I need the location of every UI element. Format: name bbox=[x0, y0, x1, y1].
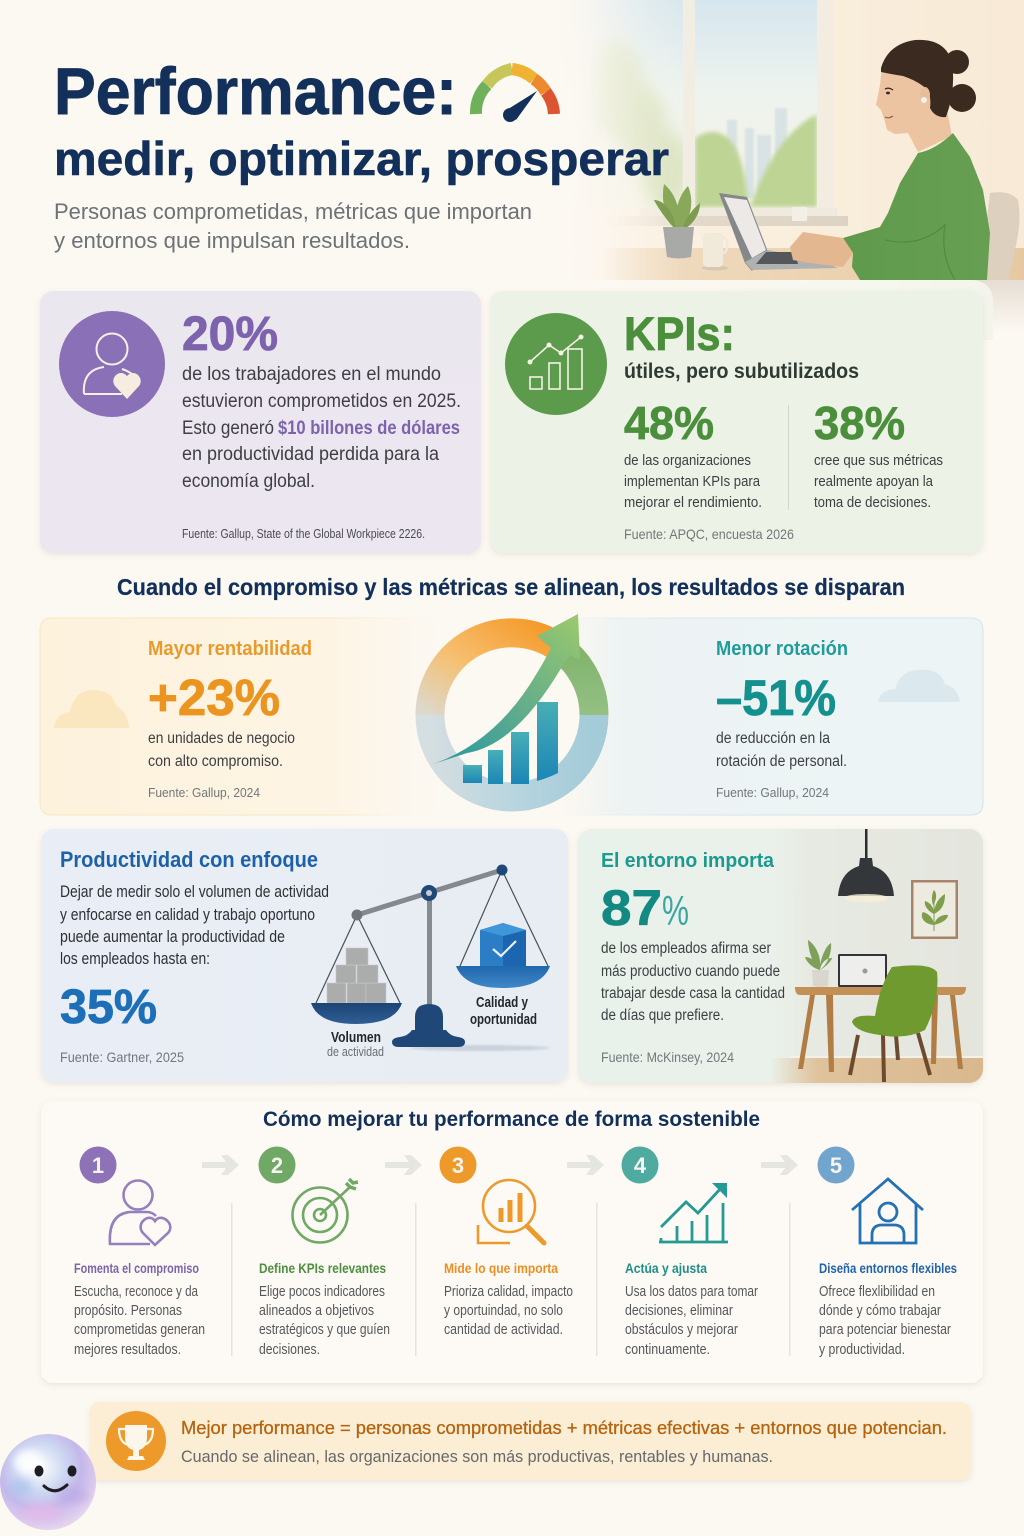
icon: trophy bbox=[106, 1411, 166, 1471]
stat 38%: 38% bbox=[814, 397, 905, 449]
text: con alto compromiso. bbox=[148, 753, 283, 770]
label calidad: oportunidad bbox=[470, 1012, 537, 1028]
mug bbox=[702, 233, 728, 270]
icon: person heart bbox=[110, 1180, 170, 1245]
text block: trabajar desde casa la cantidad bbox=[601, 985, 785, 1002]
panel: menor rotación bbox=[560, 618, 983, 815]
heading: Mayor rentabilidad bbox=[148, 638, 312, 660]
left pan with gray cubes bbox=[311, 910, 402, 1024]
step 3: cantidad de actividad. bbox=[444, 1322, 563, 1338]
label volumen bbox=[327, 1030, 384, 1059]
desk bbox=[600, 248, 1024, 280]
icon: smiling pearl mascot bbox=[0, 1434, 96, 1530]
heading KPIs: KPIs: bbox=[624, 307, 735, 360]
step 5 bbox=[818, 1146, 957, 1358]
text block: estuvieron comprometidos en 2025. bbox=[182, 391, 461, 412]
step 4: decisiones, eliminar bbox=[625, 1303, 733, 1319]
step 5: dónde y cómo trabajar bbox=[819, 1303, 941, 1319]
heading: Menor rotación bbox=[716, 638, 848, 660]
stat 38%: toma de decisiones. bbox=[814, 494, 931, 511]
woman bbox=[790, 40, 990, 280]
subtitle: y entornos que impulsan resultados. bbox=[54, 228, 410, 253]
potted plant bbox=[654, 184, 700, 258]
text block: de los trabajadores en el mundo bbox=[182, 364, 441, 385]
step 2: Elige pocos indicadores bbox=[259, 1284, 385, 1300]
label calidad: Calidad y bbox=[476, 995, 528, 1011]
text: en unidades de negocio bbox=[148, 730, 295, 747]
title bbox=[54, 54, 669, 185]
step 3 bbox=[440, 1146, 573, 1338]
panel: mayor rentabilidad bbox=[40, 618, 440, 815]
panel: productividad con enfoque bbox=[41, 829, 568, 1082]
text block: $10 billones de dólares bbox=[278, 418, 460, 439]
step 4: 4 bbox=[634, 1153, 647, 1178]
window with view of trees and city bbox=[596, 0, 848, 226]
step 2: Define KPIs relevantes bbox=[259, 1260, 386, 1276]
text block: puede aumentar la productividad de bbox=[60, 928, 285, 946]
text block bbox=[182, 364, 461, 492]
step 1: propósito. Personas bbox=[74, 1303, 182, 1319]
hero illustration: woman working at laptop by window bbox=[594, 0, 1024, 280]
source: Fuente: McKinsey, 2024 bbox=[601, 1049, 734, 1065]
right pan with blue cube bbox=[456, 864, 550, 988]
subheading: útiles, pero subutilizados bbox=[624, 360, 859, 383]
step 2 bbox=[258, 1146, 390, 1358]
step 3: 3 bbox=[452, 1153, 464, 1178]
text block: Dejar de medir solo el volumen de actividad bbox=[60, 883, 329, 901]
icon: gauge bbox=[476, 69, 554, 122]
step 5: Ofrece flexlibilidad en bbox=[819, 1284, 935, 1300]
hands bbox=[790, 232, 853, 267]
text bbox=[716, 730, 847, 770]
illustration: home office bbox=[770, 829, 983, 1083]
panel: KPIs bbox=[490, 291, 983, 553]
step 2: decisiones. bbox=[259, 1342, 320, 1358]
text block: los empleados hasta en: bbox=[60, 950, 210, 968]
text: rotación de personal. bbox=[716, 753, 847, 770]
step 1: mejores resultados. bbox=[74, 1342, 181, 1358]
chair bbox=[987, 192, 1020, 280]
source: Fuente: Gallup, 2024 bbox=[716, 785, 829, 800]
text block bbox=[601, 940, 785, 1024]
stat -51%: –51% bbox=[716, 670, 836, 726]
stat 38% bbox=[814, 397, 943, 511]
pivot and base bbox=[421, 885, 437, 901]
text block: Esto generó bbox=[182, 418, 274, 439]
lamp bbox=[865, 829, 868, 858]
icon: chart in circle bbox=[505, 313, 607, 415]
section heading: Cuando el compromiso y las métricas se alinean, los resultados se disparan bbox=[117, 574, 905, 600]
step 2: estratégicos y que guíen bbox=[259, 1322, 390, 1338]
panel: 20% trabajadores comprometidos bbox=[40, 291, 481, 553]
step 1: comprometidas generan bbox=[74, 1322, 205, 1338]
stat 87%: % bbox=[662, 887, 689, 934]
icon: rising chart bbox=[659, 1183, 728, 1242]
source: Fuente: Gallup, 2024 bbox=[148, 785, 260, 800]
label calidad bbox=[470, 995, 537, 1028]
step 4: obstáculos y mejorar bbox=[625, 1322, 738, 1338]
step 5: para potenciar bienestar bbox=[819, 1322, 951, 1338]
step 5: Diseña entornos flexibles bbox=[819, 1260, 957, 1276]
step 5: 5 bbox=[830, 1153, 842, 1178]
arrow bbox=[427, 614, 580, 766]
text block: de los empleados afirma ser bbox=[601, 940, 771, 957]
white panel rim over hero bbox=[970, 280, 1024, 332]
fade left of hero bbox=[540, 0, 667, 280]
source: Fuente: APQC, encuesta 2026 bbox=[624, 526, 794, 542]
stat +23%: +23% bbox=[148, 669, 280, 726]
text: de reducción en la bbox=[716, 730, 830, 747]
icon: magnifier with bars bbox=[478, 1180, 544, 1243]
step 4: Actúa y ajusta bbox=[625, 1260, 707, 1276]
stat 48% bbox=[624, 397, 762, 511]
step 1: Escucha, reconoce y da bbox=[74, 1284, 199, 1300]
frame bbox=[911, 880, 958, 939]
step 4: Usa los datos para tomar bbox=[625, 1284, 758, 1300]
laptop bbox=[719, 193, 838, 271]
panel: el entorno importa bbox=[578, 829, 983, 1083]
step 1: 1 bbox=[92, 1153, 104, 1178]
face and neck bbox=[876, 64, 952, 152]
callout line 2: Cuando se alinean, las organizaciones son más productivas, rentables y humanas. bbox=[181, 1448, 773, 1466]
subtitle bbox=[54, 199, 532, 253]
step 3: Mide lo que importa bbox=[444, 1260, 558, 1276]
table bbox=[795, 987, 966, 1072]
label volumen: Volumen bbox=[331, 1030, 381, 1046]
stat 20%: 20% bbox=[182, 308, 278, 361]
step 2: 2 bbox=[271, 1153, 283, 1178]
illustration: balance scale bbox=[311, 864, 550, 1059]
chair bbox=[850, 965, 938, 1082]
callout: mejor performance bbox=[90, 1402, 971, 1480]
laptop bbox=[838, 954, 887, 987]
chart: ring with rising arrow and bars bbox=[415, 614, 609, 812]
step 3: y oportuindad, no solo bbox=[444, 1303, 563, 1319]
step 1: Fomenta el compromiso bbox=[74, 1260, 199, 1276]
stat 38%: cree que sus métricas bbox=[814, 452, 943, 469]
stat 48%: mejorar el rendimiento. bbox=[624, 494, 762, 511]
heading: Productividad con enfoque bbox=[60, 847, 318, 872]
step 3: Prioriza calidad, impacto bbox=[444, 1284, 573, 1300]
icon: person with heart bbox=[59, 311, 165, 417]
heading: Cómo mejorar tu performance de forma sostenible bbox=[263, 1107, 760, 1131]
title line 2: medir, optimizar, prosperar bbox=[54, 132, 669, 185]
text block: y enfocarse en calidad y trabajo oportuno bbox=[60, 906, 315, 924]
source: Fuente: Gartner, 2025 bbox=[60, 1049, 184, 1065]
plant bbox=[805, 940, 832, 970]
stat 48%: de las organizaciones bbox=[624, 452, 751, 469]
stat 48%: implementan KPIs para bbox=[624, 473, 761, 490]
stat 87%: 87 bbox=[601, 880, 662, 936]
arrows between steps bbox=[202, 1155, 798, 1175]
step 4 bbox=[622, 1146, 758, 1358]
text block: de días que prefiere. bbox=[601, 1007, 724, 1024]
icon: cloud bbox=[878, 670, 960, 702]
stat 38%: realmente apoyan la bbox=[814, 473, 934, 490]
source: Fuente: Gallup, State of the Global Workpiece 2226. bbox=[182, 527, 425, 541]
text block: más productivo cuando puede bbox=[601, 963, 780, 980]
step 1 bbox=[74, 1146, 205, 1358]
label volumen: de actividad bbox=[327, 1045, 384, 1059]
step 4: continuamente. bbox=[625, 1342, 710, 1358]
stat 35%: 35% bbox=[60, 981, 157, 1034]
text bbox=[148, 730, 295, 770]
title line 1: Performance: bbox=[54, 54, 457, 128]
callout line 1: Mejor performance = personas comprometidas + métricas efectivas + entornos que potencian. bbox=[181, 1417, 947, 1438]
stat 87% bbox=[601, 880, 689, 936]
text block: economía global. bbox=[182, 471, 315, 492]
icon: target bbox=[292, 1179, 358, 1242]
icon: cloud bbox=[54, 690, 129, 728]
step 5: y productividad. bbox=[819, 1342, 905, 1358]
panel: cómo mejorar tu performance bbox=[41, 1101, 983, 1383]
text block: en productividad perdida para la bbox=[182, 444, 439, 465]
sweater bbox=[843, 133, 990, 280]
heading: El entorno importa bbox=[601, 849, 775, 872]
step 2: alineados a objetivos bbox=[259, 1303, 374, 1319]
text block bbox=[60, 883, 329, 968]
hair bbox=[881, 40, 953, 117]
stat 48%: 48% bbox=[624, 397, 714, 449]
icon: house with person bbox=[852, 1179, 923, 1243]
bars bbox=[463, 702, 558, 784]
subtitle: Personas comprometidas, métricas que importan bbox=[54, 199, 532, 224]
